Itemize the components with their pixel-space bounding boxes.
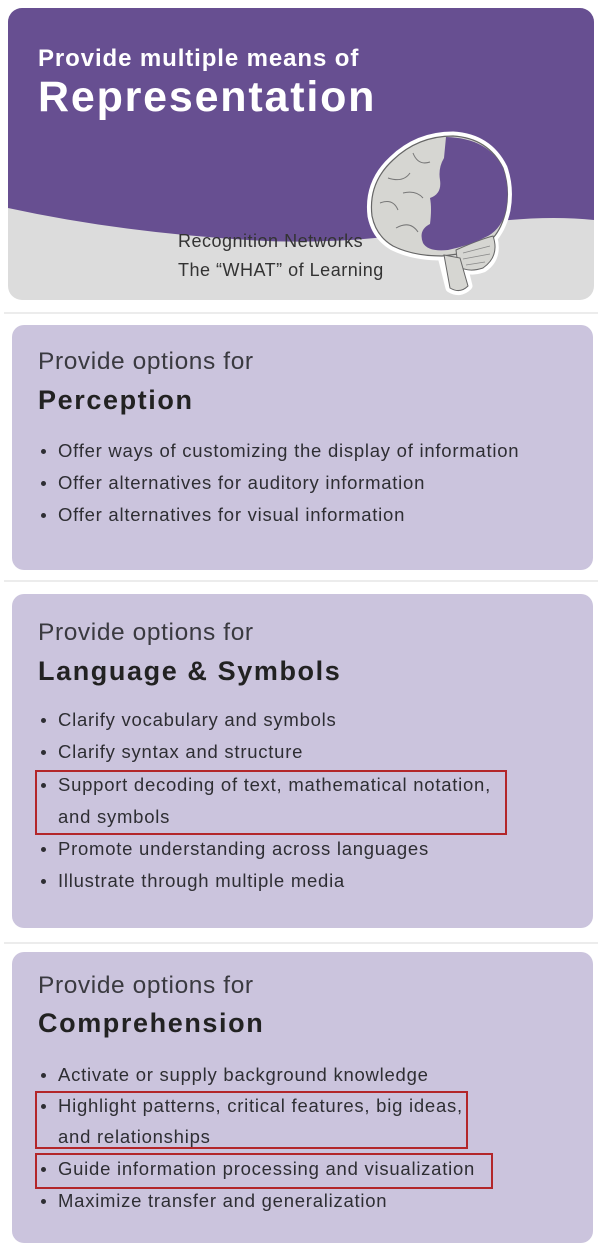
callout box [35,1153,493,1189]
panel: comprehension: and relationships [58,1126,211,1147]
callout box [35,770,507,835]
frontal gray [371,136,507,256]
panel: perception: Offer alternatives for visual information [58,504,405,525]
panel: language & symbols: Clarify vocabulary and symbols [58,709,337,730]
purple lobes [422,137,507,250]
purple wave background [8,8,594,242]
panel: comprehension: Guide information processing and visualization [58,1158,475,1179]
title: Provide multiple means of [38,45,359,72]
title [38,45,376,121]
panel: language & symbols [12,594,593,928]
panel: language & symbols: Promote understanding across languages [58,838,429,859]
panel: language & symbols: Provide options for [38,619,254,646]
subtitle: The “WHAT” of Learning [178,260,384,280]
panel: perception: Provide options for [38,348,254,375]
panel: language & symbols: Clarify syntax and structure [58,741,303,762]
panel: perception [12,325,593,570]
brainstem [444,255,468,291]
panel: comprehension: Activate or supply background knowledge [58,1064,429,1085]
panel: comprehension: Provide options for [38,972,254,999]
title: Representation [38,73,376,121]
panel: comprehension: Maximize transfer and generalization [58,1190,387,1211]
callout box [35,1091,468,1149]
panel: language & symbols: Illustrate through multiple media [58,870,345,891]
panel: comprehension: Highlight patterns, critical features, big ideas, [58,1095,463,1116]
panel: language & symbols: Support decoding of text, mathematical notation, [58,774,491,795]
panel: perception: Offer ways of customizing the display of information [58,440,519,461]
subtitle: Recognition Networks [178,231,363,251]
panel: language & symbols: Language & Symbols [38,656,341,686]
panel: language & symbols: and symbols [58,806,170,827]
subtitle [178,231,384,280]
panel: perception: Offer alternatives for auditory information [58,472,425,493]
header card [8,8,594,300]
panel: perception: Perception [38,385,194,415]
cerebellum [456,236,495,270]
panel: comprehension [12,952,593,1243]
icon: brain [366,132,512,296]
panel: comprehension: Comprehension [38,1008,264,1038]
